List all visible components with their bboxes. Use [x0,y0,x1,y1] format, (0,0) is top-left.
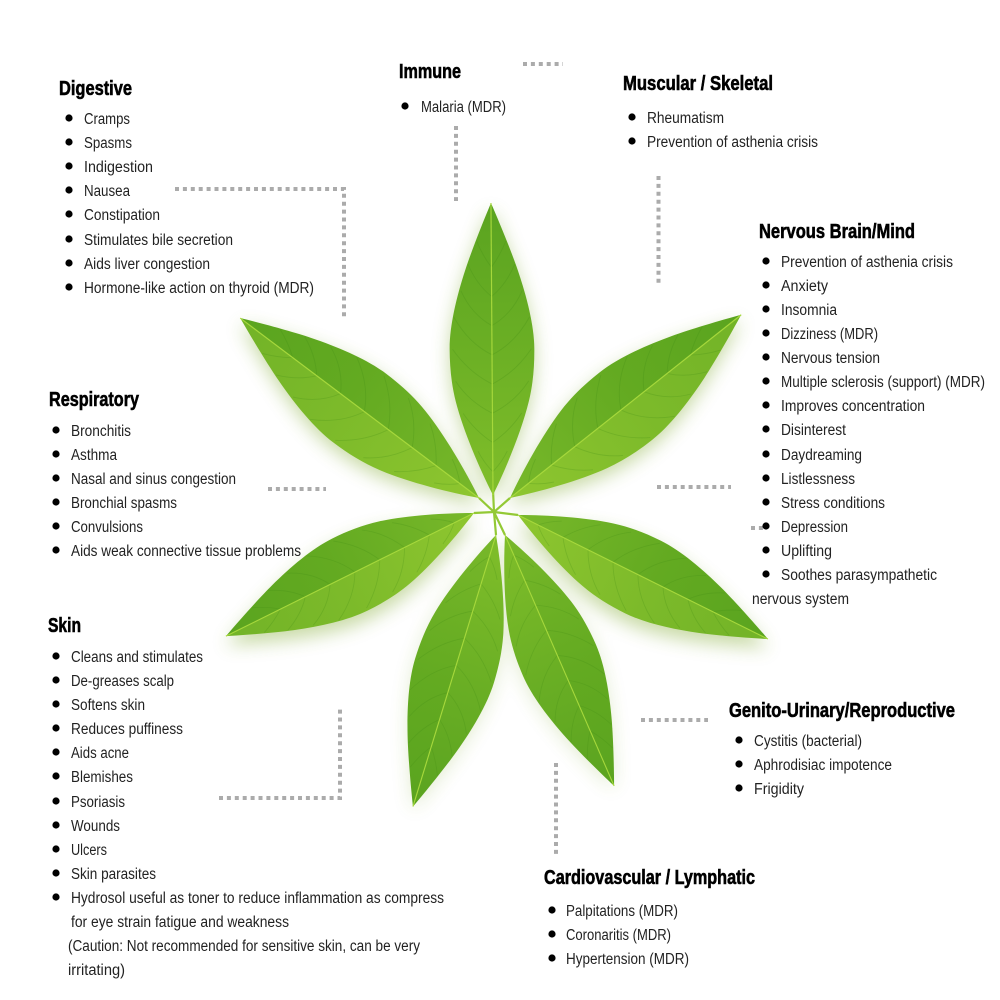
leaf shadows [208,209,786,823]
heading: nervous brain and mind: Nervous Brain/Mind [759,221,915,243]
list: digestive items: Cramps [84,111,130,128]
list: nervous items: Prevention of asthenia crisis [781,254,953,271]
list: nervous items: Insomnia [781,302,837,319]
panel: nervous brain and mind [752,221,985,608]
heading: digestive: Digestive [59,78,132,100]
list: nervous items: Dizziness (MDR) [781,326,878,343]
leaf: bottom left [374,523,535,819]
list: respiratory items: Aids weak connective tissue problems [71,543,301,560]
list: digestive items: Stimulates bile secretion [84,232,233,249]
list: skin items: Aids acne [71,745,129,762]
leaf: bottom right [469,519,650,802]
list: cardiovascular items [548,903,689,968]
list: cardiovascular items: Coronaritis (MDR) [566,927,671,944]
list: skin items: irritating) [68,962,125,979]
heading: cardiovascular lymphatic: Cardiovascular / Lymphatic [544,867,755,889]
list: skin items: Hydrosol useful as toner to reduce inflammation as compress [71,890,444,907]
list: nervous items: Uplifting [781,543,832,560]
list: digestive items [65,111,314,297]
list: genito-urinary items: Aphrodisiac impotence [754,757,892,774]
list: nervous items: Stress conditions [781,495,885,512]
leaf: left [208,477,492,672]
panel: cardiovascular lymphatic [544,867,755,968]
list: nervous items: Anxiety [781,278,828,295]
heading: respiratory: Respiratory [49,389,140,411]
panel: skin [48,615,444,979]
list: skin items: Blemishes [71,769,133,786]
list: respiratory items [52,423,301,560]
list: muscular skeletal items: Rheumatism [647,110,724,127]
heading: skin: Skin [48,615,81,637]
leaf: upper right [483,281,768,532]
heading: genito-urinary reproductive: Genito-Urinary/Reproductive [729,700,955,722]
connector: immune [454,126,458,201]
list: nervous items: Depression [781,519,848,536]
list: skin items: Skin parasites [71,866,156,883]
connector: respiratory [268,487,326,491]
leaf: upper left [214,283,505,533]
connector: skin [219,708,340,798]
list: skin items: Wounds [71,818,120,835]
connector: muscular [656,176,660,284]
list: muscular skeletal items: Prevention of asthenia crisis [647,134,818,151]
heading: immune: Immune [399,61,461,83]
connector: cardiovascular [554,763,558,855]
list: nervous items: Daydreaming [781,447,862,464]
list: genito-urinary items: Cystitis (bacterial) [754,733,862,750]
panel: muscular skeletal [623,73,818,151]
list: nervous items: Listlessness [781,471,855,488]
list: digestive items: Hormone-like action on thyroid (MDR) [84,280,314,297]
illustration: seven-leaf green plant [208,203,786,823]
list: respiratory items: Convulsions [71,519,143,536]
list: digestive items: Indigestion [84,159,153,176]
list: skin items [52,649,444,979]
leaf: right [500,479,786,675]
list: nervous items: Disinterest [781,422,847,439]
list: skin items: De-greases scalp [71,673,174,690]
list: respiratory items: Bronchitis [71,423,131,440]
list: skin items: (Caution: Not recommended for sensitive skin, can be very [68,938,420,955]
list: digestive items: Aids liver congestion [84,256,210,273]
list: digestive items: Constipation [84,207,160,224]
list: skin items: Psoriasis [71,794,125,811]
list: skin items: Ulcers [71,842,107,859]
leaf: top [449,203,535,495]
stems [474,490,518,535]
list: respiratory items: Asthma [71,447,117,464]
list: nervous items [752,254,985,608]
list: digestive items: Nausea [84,183,130,200]
list: cardiovascular items: Palpitations (MDR) [566,903,678,920]
connector: nervous [657,485,731,489]
connector: genito-urinary [641,718,708,722]
list: genito-urinary items: Frigidity [754,781,804,798]
panel: genito-urinary reproductive [729,700,955,798]
connector: nervous stub [751,526,766,530]
heading: muscular skeletal: Muscular / Skeletal [623,73,773,95]
list: nervous items: nervous system [752,591,849,608]
list: skin items: for eye strain fatigue and weakness [71,914,289,931]
list: nervous items: Nervous tension [781,350,880,367]
list: skin items: Cleans and stimulates [71,649,203,666]
list: muscular skeletal items [628,110,818,151]
connector: digestive [175,189,344,319]
list: immune items: Malaria (MDR) [421,99,506,116]
list: skin items: Softens skin [71,697,145,714]
list: respiratory items: Bronchial spasms [71,495,177,512]
list: respiratory items: Nasal and sinus congestion [71,471,236,488]
list: digestive items: Spasms [84,135,132,152]
connector: immune top stub [523,62,563,66]
panel: digestive [59,78,314,297]
panel: immune [399,61,506,116]
list: nervous items: Soothes parasympathetic [781,567,937,584]
panel: respiratory [49,389,301,560]
list: skin items: Reduces puffiness [71,721,183,738]
list: cardiovascular items: Hypertension (MDR) [566,951,689,968]
list: nervous items: Improves concentration [781,398,925,415]
list: genito-urinary items [735,733,892,798]
